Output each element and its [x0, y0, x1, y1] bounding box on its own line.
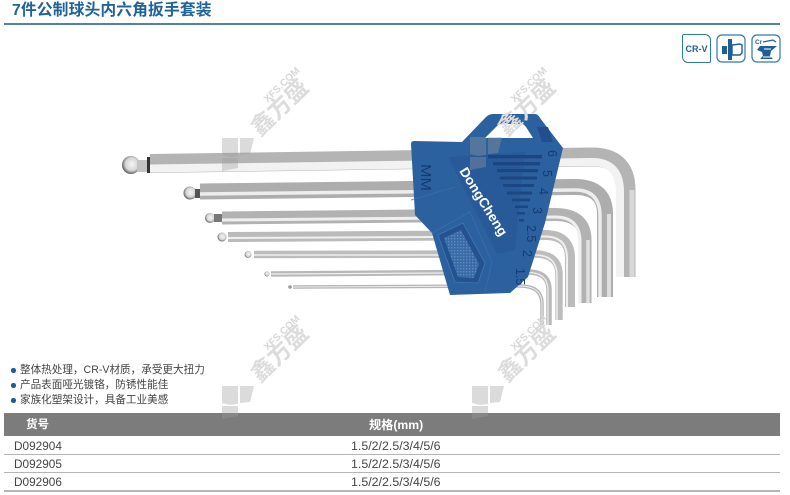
grip pad [438, 223, 485, 283]
spec table: 货号 [26, 419, 49, 431]
watermark logo top left [222, 138, 254, 171]
size numbers: 2 [520, 250, 534, 257]
watermark text bottom right: XFS.COM [509, 313, 549, 353]
size numbers: 3 [530, 207, 544, 214]
title: 7件公制球头内六角扳手套装 [12, 2, 212, 19]
spec table: 1.5/2/2.5/3/4/5/6 [351, 475, 441, 489]
wrench 1 (6 mm) [122, 156, 632, 277]
wrench 4 (3 mm) [218, 232, 570, 307]
size numbers: 5 [540, 170, 554, 177]
size numbers: 4 [536, 188, 550, 195]
feature bullet list: 产品表面哑光镀铬，防锈性能佳 [20, 379, 168, 391]
icon: chrome anvil: Cr [755, 39, 763, 46]
wrench 5 (2.5 mm) [245, 251, 559, 320]
watermark text bottom left: 鑫方盛 [246, 320, 313, 387]
spec table [4, 413, 780, 492]
spec table: D092904 [14, 439, 62, 453]
brand name: DongCheng [456, 165, 511, 239]
size numbers [513, 150, 559, 285]
size numbers: 2.5 [524, 225, 538, 242]
size numbers: 6 [545, 150, 559, 157]
size numbers: 1.5 [513, 268, 527, 285]
icon: CR-V material [682, 34, 711, 63]
spec table: D092906 [14, 475, 62, 489]
feature bullet list: 整体热处理，CR-V材质，承受更大扭力 [20, 364, 205, 376]
MM mark: MM [417, 164, 433, 191]
spec table: 规格(mm) [369, 418, 423, 432]
wrench 3 (4 mm) [205, 213, 588, 303]
blue holder [411, 114, 563, 295]
spec table: 1.5/2/2.5/3/4/5/6 [351, 457, 441, 471]
watermark text bottom left: XFS.COM [262, 313, 302, 353]
wrench 7 (1.5 mm) [288, 285, 542, 328]
icon: chrome anvil [751, 34, 781, 63]
watermark logo top right [470, 137, 502, 170]
spec table: 1.5/2/2.5/3/4/5/6 [351, 439, 441, 453]
wrench 6 (2 mm) [264, 272, 549, 325]
icon: hand tool torque [716, 34, 746, 63]
icon: CR-V material: CR-V [686, 44, 708, 54]
watermark text bottom right: 鑫方盛 [493, 320, 560, 387]
size ridges [488, 155, 542, 222]
watermark logo bottom left [222, 386, 254, 419]
watermark text top right: XFS.COM [509, 65, 549, 105]
watermark logo bottom right [472, 386, 504, 419]
wrench 2 (5 mm) [184, 186, 609, 297]
feature bullet list [11, 364, 205, 406]
watermark text top right: 鑫方盛 [493, 74, 560, 141]
feature bullet list: 家族化塑架设计，具备工业美感 [20, 394, 168, 406]
watermark text top left: XFS.COM [262, 65, 302, 105]
watermark text top left: 鑫方盛 [246, 74, 313, 141]
spec table: D092905 [14, 457, 62, 471]
